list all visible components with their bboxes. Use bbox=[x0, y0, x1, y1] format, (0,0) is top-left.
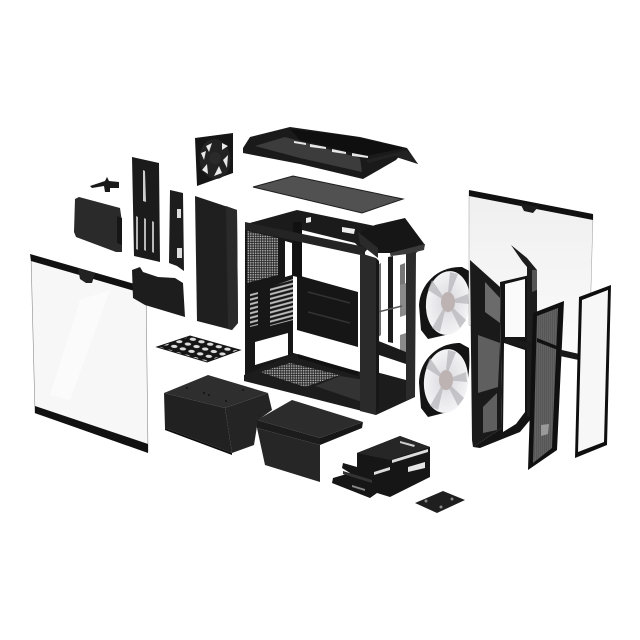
panel: left tempered glass side panel bbox=[30, 254, 148, 453]
chassis: top shroud bbox=[358, 218, 425, 258]
chassis frame bbox=[244, 210, 425, 415]
mesh front door bbox=[528, 301, 564, 470]
top mesh plate bbox=[253, 176, 403, 213]
PSU shroud box bbox=[164, 375, 272, 455]
chassis: back wall and floor bbox=[246, 210, 375, 252]
narrow bracket bbox=[169, 190, 184, 271]
chassis: front-left rail bbox=[245, 222, 365, 256]
front frame: right post bbox=[511, 245, 537, 418]
small bracket bbox=[90, 177, 119, 192]
chassis: floor with mesh bbox=[244, 354, 415, 415]
front frame with mesh bbox=[470, 245, 588, 448]
chassis: rear right post bbox=[406, 252, 416, 400]
fan: rear black fan bbox=[195, 133, 233, 186]
chassis: front post bbox=[360, 253, 379, 415]
honeycomb dust filter bbox=[157, 336, 240, 362]
drive plate bbox=[74, 197, 122, 252]
chassis: rear post bbox=[293, 222, 302, 278]
panel: narrow framed glass panel bbox=[575, 285, 611, 458]
chassis: lower right crossbar bbox=[376, 340, 406, 410]
chassis: rear windows bbox=[290, 237, 360, 380]
front crossbar bbox=[505, 337, 588, 362]
front frame: left mesh wing bbox=[470, 260, 502, 447]
drive cage bbox=[332, 436, 430, 498]
fan: lower RGB fan bbox=[419, 343, 471, 417]
panel: right tempered glass panel bbox=[469, 190, 593, 358]
chassis: perforated left section bbox=[245, 224, 293, 376]
chassis: side openings bbox=[376, 254, 407, 386]
crossbar end bbox=[560, 350, 588, 362]
front frame: centre window bbox=[473, 275, 530, 448]
small square plate bbox=[415, 491, 465, 513]
fan: upper RGB fan bbox=[419, 267, 473, 339]
cable cover bbox=[132, 267, 185, 317]
vertical slotted PCI bracket bbox=[132, 157, 160, 262]
front shroud plate bbox=[257, 400, 363, 482]
panel: tall black shroud bbox=[195, 196, 238, 330]
top cover bbox=[243, 127, 418, 179]
